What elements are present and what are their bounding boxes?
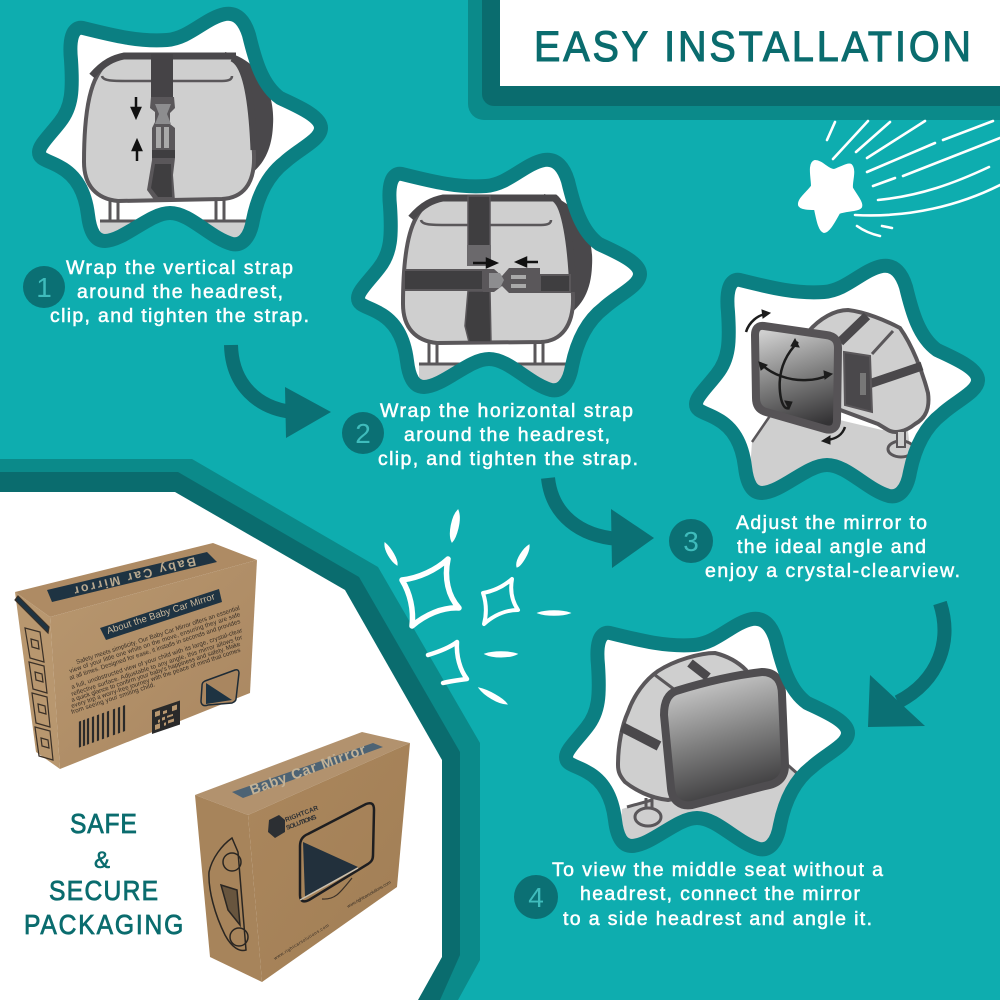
icon: horizontal strap xyxy=(404,270,570,292)
step 4 text: headrest, connect the mirror xyxy=(580,883,860,905)
icon: arrow right xyxy=(473,259,496,267)
step 1 text: clip, and tighten the strap. xyxy=(50,305,309,327)
step 2 number: 2 xyxy=(355,418,371,449)
arrow 3 to 4 xyxy=(868,603,944,727)
icon: headrest with straps xyxy=(403,194,592,343)
description text: a quick glance to confirm your baby's happiness and safety. Make xyxy=(70,641,242,704)
step 4 text: To view the middle seat without a xyxy=(552,859,883,881)
description text: reflective surface. Adjustable to any angle, this mirror allows for xyxy=(70,634,243,698)
icon: buckle xyxy=(147,97,175,201)
description text xyxy=(68,605,243,716)
safe and secure packaging label: SAFE xyxy=(70,808,137,839)
step 1 text: around the headrest, xyxy=(77,281,283,303)
step 1 number xyxy=(23,266,65,308)
box side face xyxy=(195,795,262,982)
star panel: step 3 illustration xyxy=(696,266,978,512)
car outline xyxy=(209,838,248,950)
side strip and icons xyxy=(15,596,53,760)
top banner xyxy=(47,552,217,602)
description text: at all times. Designed for ease, it installs in seconds and provides xyxy=(68,618,241,682)
safe and secure packaging label: PACKAGING xyxy=(24,909,183,940)
step 1 text: Wrap the vertical strap xyxy=(66,257,293,279)
arrow 2 to 3 xyxy=(548,478,654,568)
url text: www.rightcarsolutions.com xyxy=(346,879,392,909)
icon: headrest xyxy=(84,52,273,201)
box top face xyxy=(195,732,410,815)
sparkles xyxy=(385,510,570,704)
arrow 1 to 2 xyxy=(231,345,331,438)
mirror graphic xyxy=(300,803,374,901)
QR code xyxy=(152,700,180,734)
star panel: step 1 illustration xyxy=(39,14,321,251)
step 4 number xyxy=(514,875,558,919)
description text: every trip a worry-free journey with the peace of mind that comes xyxy=(70,647,241,710)
step 3 text: the ideal angle and xyxy=(737,536,926,558)
step 3 number: 3 xyxy=(683,526,699,557)
step 2 text xyxy=(378,400,638,470)
step 2 text: clip, and tighten the strap. xyxy=(378,448,638,470)
top banner: Baby Car Mirror xyxy=(73,554,197,598)
description text: view of your little one while on the move, ensuring they are safe xyxy=(68,611,242,675)
safe and secure packaging label xyxy=(24,808,183,940)
step 2 text: Wrap the horizontal strap xyxy=(380,400,633,422)
logo: RIGHTCAR xyxy=(284,805,320,824)
logo: SOLUTIONS xyxy=(285,814,318,832)
step 3 text: enjoy a crystal-clearview. xyxy=(705,560,960,582)
icon: mirror xyxy=(664,672,785,805)
icon: arrow left xyxy=(517,258,538,266)
header: easy installation xyxy=(468,0,1000,120)
about banner: About the Baby Car Mirror xyxy=(106,591,216,637)
icon: headrest side view xyxy=(808,310,928,457)
barcode xyxy=(80,705,124,747)
bottom-left packaging band xyxy=(0,459,480,1000)
mirror icon xyxy=(201,670,239,706)
icon: mirror with arrows xyxy=(746,310,845,444)
step 1 text xyxy=(50,257,309,327)
box side face xyxy=(15,592,60,769)
box front face xyxy=(50,560,257,769)
step 3 number xyxy=(669,519,713,563)
title: EASY INSTALLATION xyxy=(534,22,971,70)
step 4 text xyxy=(552,859,883,930)
step 3 text xyxy=(705,512,960,582)
icon: arrow down xyxy=(132,97,140,117)
shooting star xyxy=(799,121,1000,236)
step 2 text: around the headrest, xyxy=(404,424,610,446)
step 4 number: 4 xyxy=(528,882,544,913)
icon: horizontal buckle xyxy=(483,268,540,293)
icon: headrest xyxy=(618,653,760,826)
step 1 number: 1 xyxy=(36,272,52,303)
step 2 number xyxy=(342,412,384,454)
icon: arrow up xyxy=(133,141,141,161)
star panel: step 2 illustration xyxy=(358,160,640,394)
logo xyxy=(268,805,320,838)
url text xyxy=(273,879,392,961)
box: back view xyxy=(15,543,257,769)
safe and secure packaging label: SECURE xyxy=(49,875,158,906)
box front face xyxy=(248,743,410,982)
safe and secure packaging label: & xyxy=(94,847,110,874)
description text: from seeing your smiling child. xyxy=(70,681,156,716)
top banner: Baby Car Mirror xyxy=(248,742,368,799)
description text: a full, unobstructed view of your child with its large, crystal-clear xyxy=(70,627,243,691)
box: front view xyxy=(195,732,410,982)
description text: Safety meets simplicity. Our Baby Car Mirror offers an essential xyxy=(75,605,241,666)
step 3 text: Adjust the mirror to xyxy=(736,512,927,534)
url text: www.rightcarsolutions.com xyxy=(273,923,330,961)
star panel: step 4 illustration xyxy=(566,619,848,865)
box top face xyxy=(15,543,257,617)
step 4 text: to a side headrest and angle it. xyxy=(563,908,872,930)
